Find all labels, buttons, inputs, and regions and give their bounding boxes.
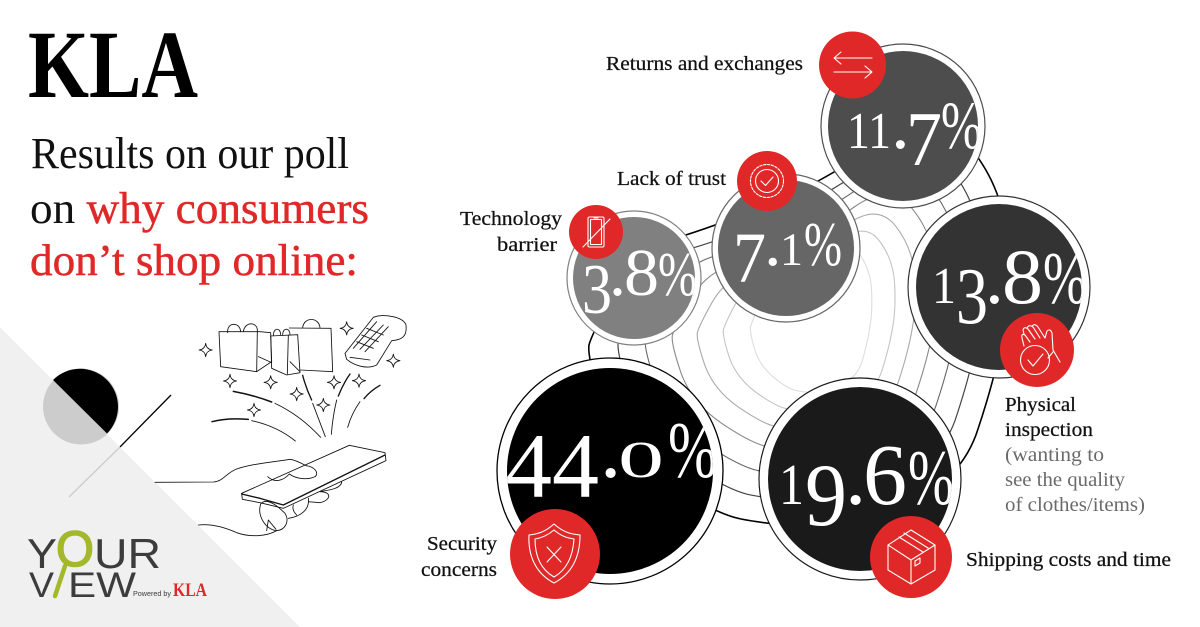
circle: technology barrier 3.8%: % [658,241,697,309]
circle: technology barrier 3.8%: 3 [582,251,612,329]
Your View logo: Powered by [133,591,172,598]
circle: lack of trust 7.1% [712,174,860,322]
icon: shield with cross [510,509,600,599]
icon: return arrows [819,32,886,98]
circle: returns and exchanges 11.7%: . [891,82,910,165]
circle: shipping costs and time 19.6%: . [845,429,866,523]
circle: lack of trust 7.1%: 1 [780,224,803,276]
circle: returns and exchanges 11.7%: % [941,87,982,163]
Your View logo: KLA [173,580,207,601]
icon: crossed-out phone [569,205,623,259]
circle: technology barrier 3.8%: 8 [624,236,659,310]
icon: hand inspecting [1000,313,1074,387]
circle: returns and exchanges 11.7%: 7 [906,96,942,182]
circle: security concerns 44.0%: 0 [618,432,664,489]
circle: physical inspection 13.8% [908,196,1090,378]
icon: trust badge [737,151,797,211]
circle: physical inspection 13.8%: 1 [932,258,956,315]
circle: physical inspection 13.8%: 8 [1002,233,1043,320]
circle: shipping costs and time 19.6%: % [908,434,954,521]
circle: shipping costs and time 19.6%: 9 [805,447,847,545]
circle: technology barrier 3.8%: . [609,234,626,310]
circle: shipping costs and time 19.6%: 6 [863,426,907,523]
hand holding phone [155,445,386,536]
grey corner triangle [0,327,300,627]
circle: shipping costs and time 19.6% [759,378,961,580]
label: returns and exchanges: Returns and exchanges [606,53,803,75]
circle: technology barrier 3.8% [567,211,701,345]
circle: physical inspection 13.8%: 3 [956,251,988,341]
label: physical inspection: of clothes/items) [1005,494,1145,516]
label: shipping costs and time: Shipping costs and time [966,549,1171,571]
circle: returns and exchanges 11.7%: 11 [847,103,891,160]
burst lines [212,374,380,441]
icon: shopping bags [219,320,333,375]
icon: parcel box [870,516,952,598]
half circle emblem [43,368,171,497]
title: don’t shop online: [30,236,358,285]
label: physical inspection [1005,394,1145,516]
label: technology barrier: barrier [497,234,557,256]
circle: shipping costs and time 19.6%: 1 [779,452,804,517]
circle: lack of trust 7.1%: % [804,211,842,279]
circle: security concerns 44.0%: . [600,402,621,496]
Your View logo: Y [27,530,57,577]
title [30,129,369,285]
label: lack of trust: Lack of trust [617,168,726,190]
label: technology barrier: Technology [460,208,562,230]
KLA logo: KLA [28,11,198,118]
circle: security concerns 44.0%: 44 [505,415,599,517]
Your View logo: O [56,521,94,577]
contour lines background [589,125,1008,527]
circle: physical inspection 13.8%: % [1043,238,1087,320]
circle: lack of trust 7.1%: . [764,204,782,281]
circle: physical inspection 13.8%: . [985,237,1004,320]
Your View logo: UR [94,530,161,577]
label: security concerns: concerns [421,559,497,581]
circle: lack of trust 7.1%: 7 [733,218,766,298]
Your View logo [27,521,207,605]
label: physical inspection: see the quality [1005,469,1125,491]
label: security concerns: Security [427,533,497,555]
label: technology barrier [460,208,562,256]
label: physical inspection: Physical [1005,394,1076,416]
icon: sparkles [199,322,400,417]
icon: payment terminal [345,316,406,367]
label: physical inspection: inspection [1005,419,1093,441]
illustration: hand with phone, bags and payment terminal [155,316,406,536]
circle: returns and exchanges 11.7% [821,44,985,208]
title: Results on our poll [31,129,349,178]
Your View logo: EW [68,566,136,605]
circle: security concerns 44.0%: % [668,407,717,495]
title: on why consumers [30,184,369,233]
circle: security concerns 44.0% [497,358,723,584]
label: security concerns [421,533,497,581]
label: physical inspection: (wanting to [1005,444,1104,466]
Your View logo: V [29,566,55,605]
